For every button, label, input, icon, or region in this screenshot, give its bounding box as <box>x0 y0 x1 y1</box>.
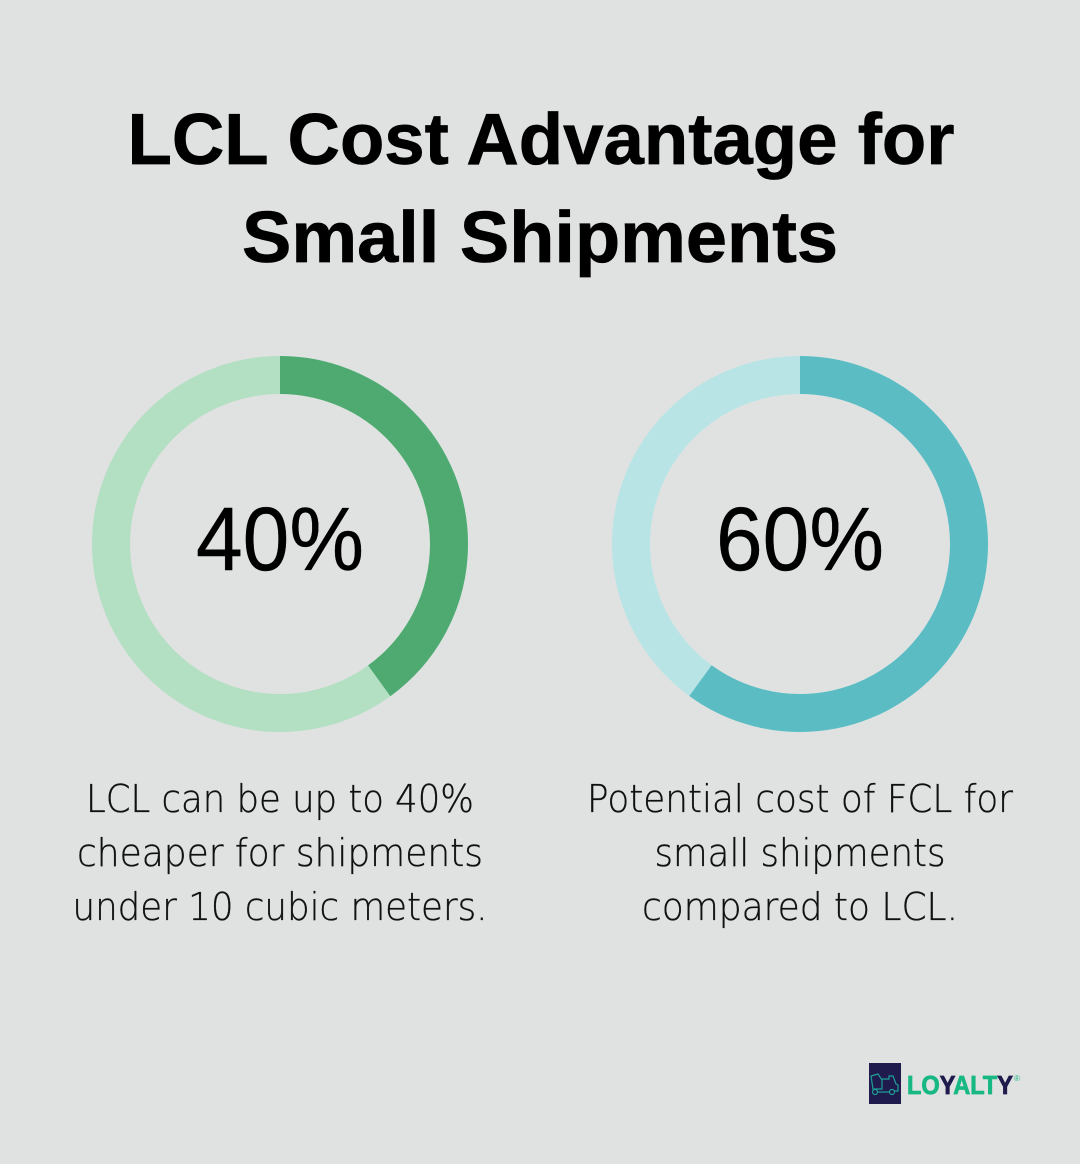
value: 40%: 40% <box>196 490 364 590</box>
description: LCL: LCL can be up to 40% <box>86 777 474 821</box>
description: FCL: compared to LCL. <box>642 885 958 929</box>
title: LCL Cost Advantage for <box>128 100 954 180</box>
description: LCL <box>72 777 488 929</box>
logo: Loyalty <box>869 1063 1020 1104</box>
icon: truck <box>869 1063 901 1104</box>
description: LCL: under 10 cubic meters. <box>72 885 488 929</box>
wordmark: ® <box>1014 1074 1020 1083</box>
description: FCL: Potential cost of FCL for <box>587 777 1013 821</box>
panel: 40% cheaper <box>72 375 488 929</box>
value: 60%: 60% <box>716 490 884 590</box>
title: Small Shipments <box>242 198 838 278</box>
description: LCL: cheaper for shipments <box>77 831 483 875</box>
panel: 60% cost <box>587 375 1013 929</box>
wordmark: LOYALTY <box>907 1070 1013 1100</box>
donut chart: 60% <box>631 375 969 713</box>
description: FCL: small shipments <box>654 831 946 875</box>
donut chart: 40% <box>111 375 449 713</box>
description: FCL <box>587 777 1013 929</box>
title <box>128 100 954 278</box>
